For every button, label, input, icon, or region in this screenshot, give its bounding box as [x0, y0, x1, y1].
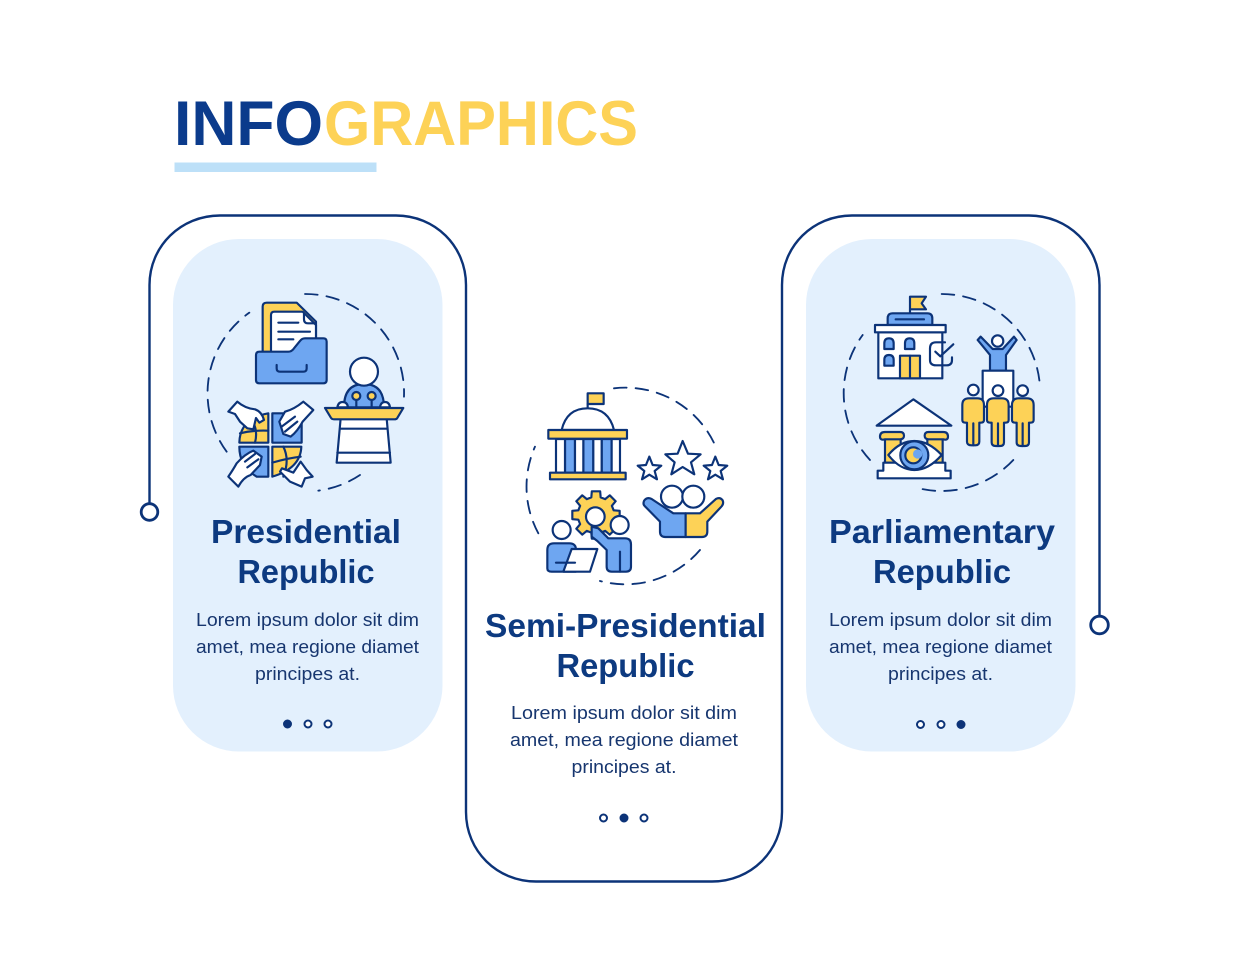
description line 3: principes at. [572, 756, 676, 777]
title underline [174, 162, 376, 172]
two raised-arm people [644, 486, 723, 537]
description: Lorem ipsum dolor sit dim [511, 702, 737, 723]
parliament building with checkmark [875, 297, 953, 378]
panel text: parliamentary [829, 513, 1056, 684]
folder with documents [256, 303, 327, 383]
rating stars [638, 441, 727, 479]
icon: presidential republic [208, 294, 404, 491]
dashed ring [844, 294, 1040, 491]
connecting outline [150, 216, 1100, 882]
hands holding globe pieces [228, 402, 313, 487]
title: GRAPHICS [324, 89, 638, 159]
heading: Semi-Presidential [485, 607, 766, 644]
description line 3: principes at. [255, 663, 360, 684]
icon: parliamentary republic [844, 294, 1040, 491]
description line 2: amet, mea regione diamet [196, 636, 419, 657]
speaker at podium [325, 358, 403, 463]
description line 3: principes at. [888, 663, 993, 684]
icon: semi-presidential republic [527, 388, 727, 584]
heading second line: Republic [873, 553, 1011, 590]
title [174, 89, 638, 159]
panel text: semi-presidential [485, 607, 766, 777]
step dots 2 [600, 814, 648, 822]
description line 2: amet, mea regione diamet [510, 729, 738, 750]
description: Lorem ipsum dolor sit dim [829, 609, 1052, 630]
step dots 3 [917, 721, 964, 728]
description line 2: amet, mea regione diamet [829, 636, 1052, 657]
columned temple with watching eye [877, 399, 951, 478]
right end node [1091, 616, 1108, 634]
dashed ring [527, 388, 715, 584]
heading: Parliamentary [829, 513, 1056, 550]
panel text: presidential [196, 513, 419, 684]
description: Lorem ipsum dolor sit dim [196, 609, 419, 630]
heading: Presidential [211, 513, 401, 550]
title: INFO [174, 89, 323, 159]
panel background: presidential [173, 239, 442, 752]
step dots 1 [284, 720, 332, 728]
panel background: parliamentary [806, 239, 1076, 752]
crowd and leader [962, 335, 1034, 446]
team with gear [547, 491, 631, 572]
left end node [141, 504, 158, 520]
heading second line: Republic [556, 647, 694, 684]
dashed ring [208, 294, 404, 491]
heading second line: Republic [238, 553, 374, 590]
government building [548, 393, 627, 479]
